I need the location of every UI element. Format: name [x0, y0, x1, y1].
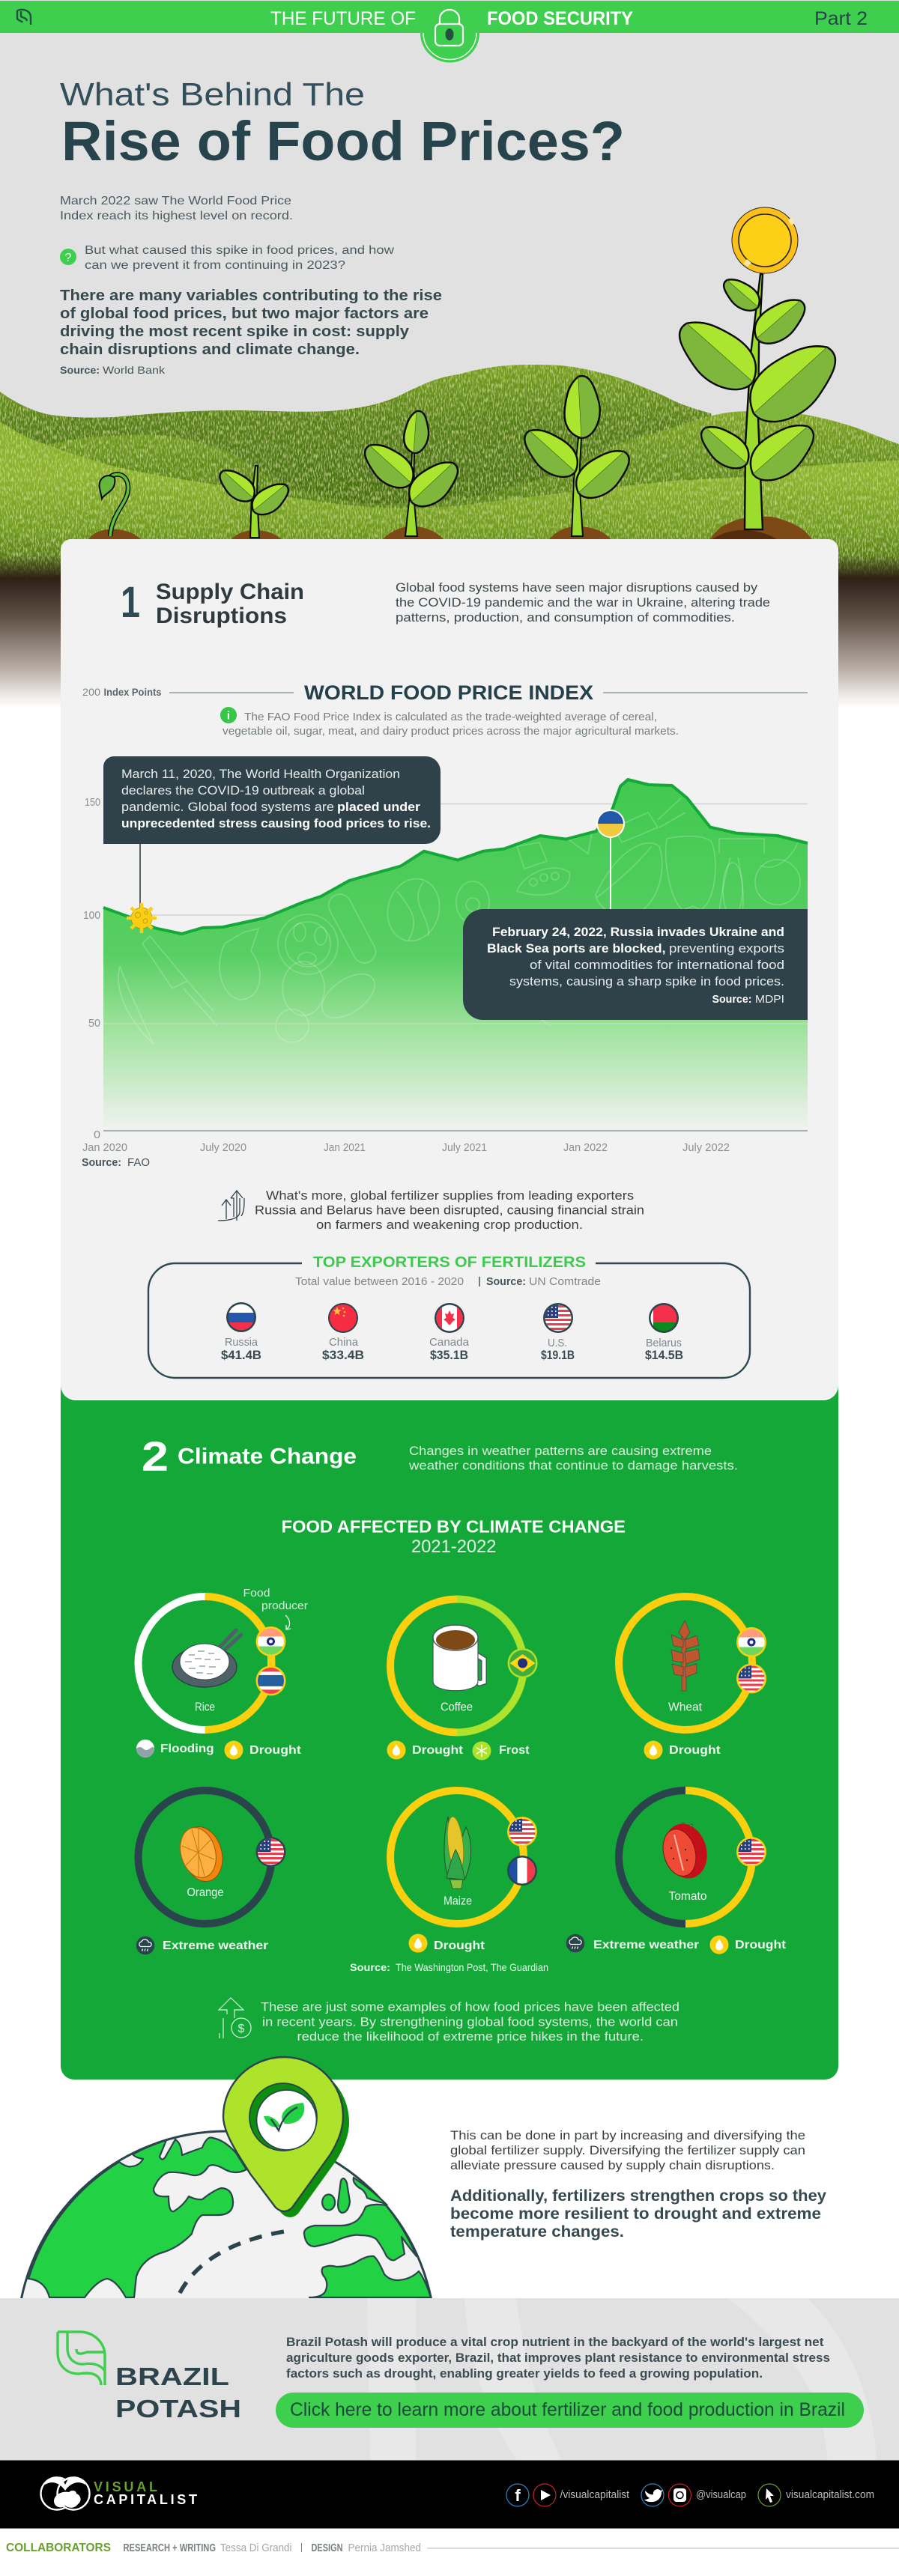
- closing emphasis: Additionally, fertilizers strengthen crops so they: [450, 2187, 826, 2205]
- ring: [138, 1790, 271, 1924]
- panel: top exporters: [148, 1254, 750, 1378]
- food heading: [282, 1517, 626, 1557]
- legend: drought: [409, 1933, 485, 1953]
- exporter: us: [541, 1303, 575, 1362]
- section text: [396, 580, 770, 625]
- chart heading: 200: [82, 687, 100, 698]
- question text: [85, 244, 395, 272]
- ring: [390, 1790, 524, 1924]
- sponsor text: Brazil Potash will produce a vital crop nutrient in the backyard of the world's largest net: [286, 2335, 824, 2349]
- note text: vegetable oil, sugar, meat, and dairy product prices across the major agricultural markets.: [223, 725, 679, 738]
- section text: Global food systems have seen major disruptions caused by: [396, 580, 758, 595]
- food: coffee: [387, 1600, 538, 1760]
- exporter: canada: Canada: [429, 1336, 470, 1349]
- exporter: belarus: $14.5B: [645, 1348, 683, 1362]
- legend: drought: [644, 1740, 721, 1760]
- callout: ukraine: systems, causing a sharp spike in food prices.: [509, 974, 784, 988]
- summary text: driving the most recent spike in cost: supply: [60, 323, 410, 340]
- exporter: us: U.S.: [548, 1337, 567, 1349]
- social: twitter: [641, 2484, 664, 2506]
- closing text: reduce the likelihood of extreme price hikes in the future.: [297, 2029, 644, 2044]
- closing text: [261, 1999, 679, 2044]
- panel: climate change backing: [61, 1385, 838, 2080]
- callout: covid: [103, 756, 441, 844]
- intro text: March 2022 saw The World Food Price: [60, 195, 291, 207]
- collaborators: [6, 2542, 899, 2554]
- flag: us: [736, 1664, 766, 1694]
- grass to soil fade: [0, 556, 899, 578]
- x axis labels: July 2021: [442, 1141, 487, 1154]
- collaborators: Pernia Jamshed: [348, 2542, 421, 2554]
- illustration: tomato: [658, 1819, 713, 1883]
- soil fade: [0, 577, 899, 708]
- land: right continent upper: [304, 2205, 417, 2260]
- question text: But what caused this spike in food prices, and how: [85, 244, 395, 257]
- x axis labels: Jan 2021: [324, 1141, 366, 1154]
- visual capitalist name: CAPITALIST: [94, 2492, 197, 2507]
- flag connector: [267, 1647, 274, 1677]
- chart heading: WORLD FOOD PRICE INDEX: [304, 681, 593, 704]
- food: maize: [390, 1790, 538, 1953]
- illustration: wheat: [671, 1620, 700, 1691]
- plant 3: young plant: [357, 410, 466, 544]
- section text: Changes in weather patterns are causing extreme: [409, 1444, 712, 1458]
- illustration: rice bowl: [172, 1630, 241, 1687]
- icon: question mark: [60, 249, 76, 265]
- section text: the COVID-19 pandemic and the war in Ukraine, altering trade: [396, 595, 770, 610]
- exporter: china: China: [329, 1336, 359, 1349]
- food doodles: [118, 798, 800, 1045]
- x axis labels: [82, 1141, 730, 1154]
- intro text: Index reach its highest level on record.: [60, 210, 293, 222]
- callout: covid: pandemic. Global food systems are: [121, 800, 334, 814]
- social: vc handle: /visualcapitalist: [560, 2489, 629, 2501]
- legend: extreme weather: Extreme weather: [593, 1939, 699, 1951]
- part number: Part 2: [814, 8, 868, 29]
- section heading: Climate Change: [178, 1444, 357, 1469]
- x axis: [103, 1130, 808, 1131]
- legend: drought: Drought: [434, 1939, 485, 1952]
- legend: flooding: [136, 1740, 214, 1758]
- closing paragraph: [450, 2128, 805, 2172]
- label: Wheat: [668, 1701, 703, 1714]
- fertilizer text: [255, 1188, 644, 1232]
- icon: ukraine marker: [596, 809, 625, 838]
- icon: info: [220, 707, 237, 723]
- callout: ukraine: preventing exports: [669, 941, 784, 956]
- flag: brazil: [508, 1648, 538, 1678]
- grass hills: [0, 365, 899, 584]
- land: islands: [322, 2178, 386, 2213]
- x axis labels: July 2022: [682, 1141, 730, 1154]
- land: left continent: [28, 2138, 246, 2297]
- visual capitalist name: VISUAL: [94, 2479, 157, 2494]
- label: Tomato: [668, 1890, 707, 1903]
- x axis labels: Jan 2022: [563, 1141, 608, 1154]
- bar background: [0, 1, 899, 33]
- exporters subtitle: UN Comtrade: [529, 1276, 601, 1288]
- social: website url: visualcapitalist.com: [786, 2489, 874, 2501]
- exporters frame: [148, 1263, 750, 1378]
- note text: [223, 711, 679, 738]
- legend: extreme weather: [566, 1933, 699, 1953]
- section number 2: 2: [142, 1433, 169, 1480]
- closing emphasis: temperature changes.: [450, 2223, 624, 2241]
- label: Maize: [444, 1895, 472, 1908]
- legend: extreme weather: Extreme weather: [163, 1939, 268, 1952]
- x axis labels: July 2020: [200, 1141, 246, 1154]
- chart heading: [82, 681, 808, 704]
- y axis labels: 0: [94, 1128, 100, 1141]
- exporters subtitle: Source:: [486, 1276, 526, 1288]
- food producer note: [243, 1588, 308, 1629]
- closing text: These are just some examples of how food prices have been affected: [261, 1999, 679, 2014]
- ring: [390, 1600, 457, 1733]
- y axis labels: 50: [88, 1017, 100, 1030]
- source: world bank: Source:: [60, 364, 100, 376]
- sponsor text: [286, 2335, 830, 2381]
- social: vc twitter handle: @visualcap: [696, 2489, 746, 2501]
- globe: [20, 2130, 432, 2298]
- header bar: [0, 1, 899, 63]
- social: website: [758, 2484, 781, 2506]
- legend: drought: Drought: [735, 1939, 787, 1951]
- land: right continent lower: [309, 2256, 431, 2297]
- badge: lock: [420, 10, 479, 63]
- brazil potash icon: [58, 2332, 105, 2385]
- source: climate: Source:: [350, 1961, 390, 1973]
- summary text: chain disruptions and climate change.: [60, 341, 360, 358]
- brazil potash name: BRAZIL: [115, 2363, 229, 2390]
- question: [60, 244, 395, 272]
- hill: front: [0, 422, 899, 584]
- button: Click here to learn more about fertilizer and food production in Brazil: [290, 2399, 845, 2420]
- label: Rice: [195, 1701, 215, 1714]
- grid lines: [103, 804, 808, 915]
- legend: drought: Drought: [669, 1744, 721, 1757]
- source: climate: The Washington Post, The Guardian: [396, 1961, 548, 1973]
- callout: covid: placed under: [337, 800, 420, 814]
- callout: covid: March 11, 2020, The World Health Organization: [121, 767, 400, 781]
- plant 4: growing plant: [516, 375, 638, 544]
- icon: question mark: ?: [65, 252, 72, 264]
- exporter: russia: [221, 1302, 261, 1362]
- flag: us: [736, 1837, 766, 1867]
- title: [60, 76, 625, 172]
- food producer note: producer: [261, 1600, 308, 1612]
- social: facebook: [506, 2484, 529, 2506]
- callout: ukraine: MDPI: [755, 994, 784, 1006]
- closing paragraph: alleviate pressure caused by supply chain disruptions.: [450, 2158, 775, 2172]
- section number 1: 1: [121, 578, 140, 627]
- icon: leaf logo: [17, 10, 31, 25]
- callout: ukraine: Source:: [712, 994, 752, 1006]
- illustration: orange slice: [175, 1823, 228, 1886]
- fertilizer text: What's more, global fertilizer supplies from leading exporters: [266, 1188, 634, 1203]
- ring: [619, 1597, 752, 1730]
- callout: ukraine: of vital commodities for international food: [530, 958, 784, 972]
- flag: thailand: [256, 1665, 286, 1695]
- social: instagram: [668, 2484, 691, 2506]
- intro text: [60, 195, 293, 222]
- closing text: in recent years. By strengthening global food systems, the world can: [262, 2014, 678, 2029]
- title line 1: What's Behind The: [60, 76, 365, 112]
- exporter: china: [322, 1303, 364, 1362]
- panel: climate change: [136, 1433, 787, 2044]
- plant 2: seedling: [214, 463, 294, 542]
- exporters subtitle: Total value between 2016 - 2020: [295, 1276, 464, 1288]
- title line 2: Rise of Food Prices?: [61, 110, 625, 172]
- summary text: There are many variables contributing to the rise: [60, 288, 442, 304]
- brazil potash name: [115, 2363, 241, 2422]
- source: fao: FAO: [127, 1157, 150, 1169]
- hill: middle: [30, 411, 899, 584]
- source: world bank: World Bank: [103, 364, 166, 376]
- label: Orange: [187, 1886, 224, 1899]
- section text: patterns, production, and consumption of commodities.: [396, 610, 735, 625]
- social: youtube: [533, 2484, 556, 2506]
- flag: us: [507, 1817, 537, 1847]
- visual capitalist name: [94, 2479, 197, 2507]
- closing paragraph: This can be done in part by increasing and diversifying the: [450, 2128, 805, 2142]
- legend: drought: Drought: [412, 1744, 464, 1757]
- social: facebook: f: [515, 2486, 521, 2505]
- legend: extreme weather: [136, 1936, 268, 1954]
- header text left: THE FUTURE OF: [270, 8, 416, 29]
- footer: [0, 2461, 899, 2528]
- y axis labels: 100: [83, 909, 100, 922]
- plant 1: sprout: [86, 474, 144, 542]
- flag: india: [736, 1627, 766, 1658]
- illustration: corn: [444, 1816, 471, 1889]
- exporter: belarus: [645, 1303, 683, 1362]
- summary text: [60, 288, 442, 358]
- grid line: 50: [103, 1023, 808, 1024]
- flag: france: [507, 1856, 538, 1886]
- exporter: russia: $41.4B: [221, 1348, 261, 1362]
- closing emphasis: become more resilient to drought and extreme: [450, 2205, 821, 2223]
- y axis labels: [83, 796, 100, 1141]
- connector: ukraine: [610, 838, 611, 910]
- icon: sprout: [264, 2103, 304, 2130]
- legend: drought: [225, 1740, 301, 1760]
- callout: ukraine: [463, 909, 808, 1020]
- icon: virus: [127, 903, 157, 933]
- legend: drought: [710, 1935, 787, 1954]
- collaborators: DESIGN: [312, 2542, 343, 2554]
- hill: back: [0, 365, 749, 584]
- food heading: FOOD AFFECTED BY CLIMATE CHANGE: [282, 1517, 626, 1537]
- callout: covid: unprecedented stress causing food prices to rise.: [121, 816, 431, 830]
- chart heading: Index Points: [103, 687, 162, 698]
- food: rice: [136, 1588, 308, 1760]
- section heading: [156, 580, 304, 628]
- icon: price arrow: $: [238, 2023, 245, 2035]
- collaborators: Tessa Di Grandi: [220, 2542, 292, 2554]
- callout: ukraine: Black Sea ports are blocked,: [487, 941, 665, 956]
- source: world bank: [60, 364, 166, 376]
- visual capitalist logo: [40, 2476, 90, 2510]
- section heading: Supply Chain: [156, 580, 304, 604]
- food: wheat: [619, 1597, 766, 1760]
- food producer note: Food: [243, 1588, 270, 1600]
- icon: price arrow: [219, 1998, 251, 2038]
- section text: [408, 1444, 738, 1472]
- legend: frost: Frost: [499, 1744, 530, 1757]
- sponsor band: [0, 2298, 899, 2461]
- plant 5: coin plant: [667, 207, 850, 544]
- hero background: [0, 0, 899, 569]
- fertilizer text: on farmers and weakening crop production.: [316, 1218, 583, 1232]
- flag: us: [256, 1837, 286, 1867]
- map pin: [223, 2057, 349, 2217]
- exporter: china: $33.4B: [322, 1348, 364, 1362]
- icon: info: i: [227, 710, 230, 722]
- callout: covid: declares the COVID-19 outbreak a global: [121, 783, 365, 798]
- label: Coffee: [441, 1701, 473, 1714]
- food: orange: [136, 1790, 286, 1954]
- area chart: [82, 780, 808, 1154]
- closing emphasis: [450, 2187, 826, 2241]
- closing paragraph: global fertilizer supply. Diversifying the fertilizer supply can: [450, 2143, 805, 2157]
- connector: covid: [139, 844, 141, 910]
- ring: [139, 1597, 205, 1730]
- sponsor text: agriculture goods exporter, Brazil, that improves plant resistance to environmental stress: [286, 2351, 830, 2365]
- header text right: FOOD SECURITY: [487, 8, 633, 29]
- collaborators: RESEARCH + WRITING: [123, 2542, 216, 2554]
- note text: The FAO Food Price Index is calculated as the trade-weighted average of cereal,: [244, 711, 657, 723]
- summary text: of global food prices, but two major factors are: [60, 306, 429, 322]
- illustration: mug: [433, 1625, 484, 1691]
- section text: weather conditions that continue to damage harvests.: [408, 1459, 738, 1472]
- food: tomato: [566, 1790, 787, 1954]
- y axis labels: 150: [85, 796, 100, 809]
- exporters title: TOP EXPORTERS OF FERTILIZERS: [313, 1254, 586, 1271]
- price line: [103, 780, 808, 934]
- exporter: canada: $35.1B: [430, 1348, 468, 1362]
- source: fao: Source:: [82, 1157, 121, 1169]
- legend: drought: Drought: [249, 1744, 301, 1757]
- brazil potash name: POTASH: [115, 2395, 241, 2422]
- legend: frost: [472, 1742, 530, 1760]
- legend: drought: [387, 1740, 464, 1760]
- section heading: Disruptions: [156, 604, 287, 628]
- source: fao: [82, 1157, 150, 1169]
- icon: rising arrows: [218, 1191, 244, 1221]
- panel: supply chain: [61, 539, 838, 1400]
- question text: can we prevent it from continuing in 2023?: [85, 259, 345, 272]
- exporter: canada: [429, 1303, 470, 1362]
- icon: gold coin: [732, 207, 798, 273]
- route: [180, 2232, 284, 2293]
- area fill: [103, 780, 808, 1131]
- chart note: [220, 707, 679, 738]
- exporter: belarus: Belarus: [646, 1337, 682, 1349]
- food heading: 2021-2022: [411, 1537, 496, 1557]
- sponsor text: factors such as drought, enabling greater yields to feed a growing population.: [286, 2366, 763, 2381]
- fertilizer text: Russia and Belarus have been disrupted, causing financial strain: [255, 1203, 644, 1218]
- legend: flooding: Flooding: [160, 1743, 214, 1755]
- flag: india: [256, 1626, 286, 1656]
- collaborators: COLLABORATORS: [6, 2542, 111, 2554]
- exporters subtitle: [295, 1276, 601, 1288]
- button: [276, 2393, 864, 2428]
- callout: ukraine: February 24, 2022, Russia invades Ukraine and: [492, 925, 784, 939]
- exporter: russia: Russia: [225, 1336, 258, 1349]
- x axis labels: Jan 2020: [82, 1141, 127, 1154]
- exporter: us: $19.1B: [541, 1348, 575, 1362]
- ring: [619, 1790, 685, 1924]
